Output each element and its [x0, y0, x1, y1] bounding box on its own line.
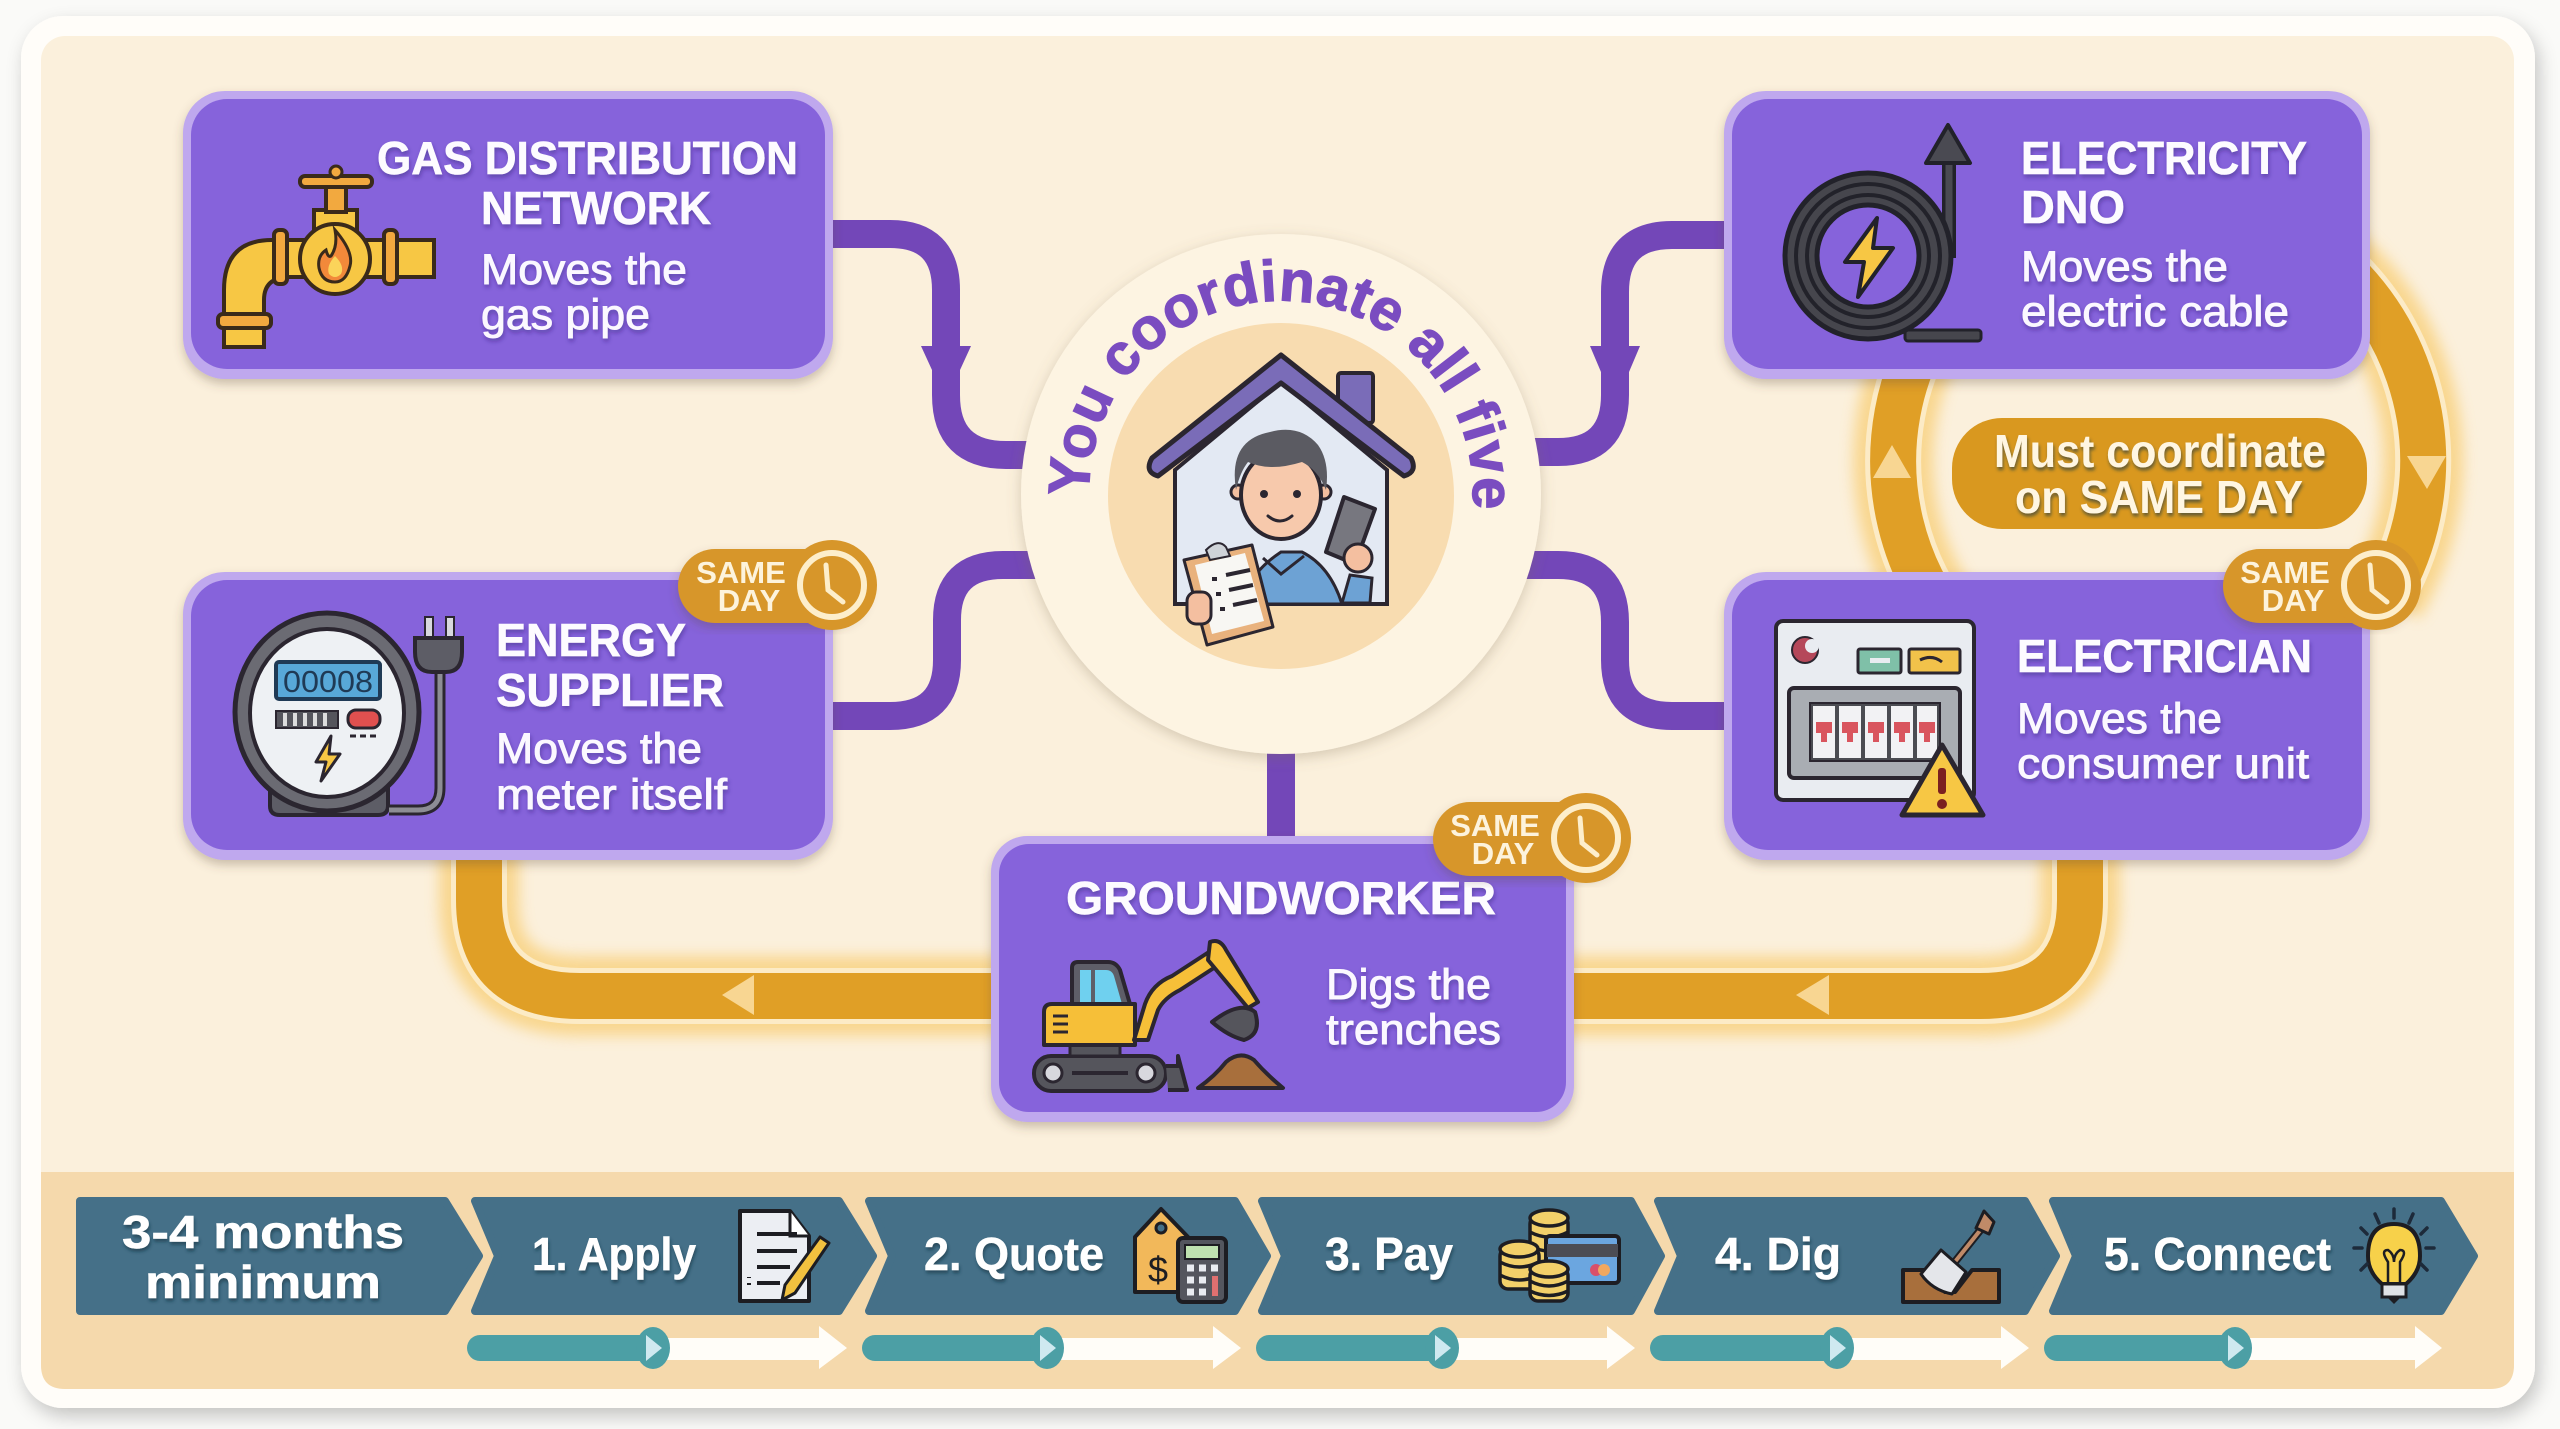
- text: electrician: ELECTRICIAN: [2017, 630, 2312, 682]
- icon: gas pipe valve: [218, 166, 434, 347]
- icon: excavator and dirt: [1034, 941, 1283, 1091]
- text: electricity dno: Moves the: [2021, 243, 2228, 291]
- chevron: quote: [869, 1201, 1267, 1311]
- chevron: 3-4 months minimum: minimum: [145, 1256, 381, 1308]
- icon: cable coil with arrow: [1785, 125, 1981, 341]
- inner disc: [1108, 323, 1454, 669]
- progress arrow 1: [467, 1326, 847, 1369]
- badge: same day energy supplier: [678, 540, 877, 630]
- icon: price tag and calculator: [1135, 1209, 1226, 1302]
- icon: person in house: [1149, 355, 1413, 645]
- gold path: groundworker to energy supplier: [479, 850, 1000, 996]
- panel: timeline strip: [41, 1172, 2514, 1389]
- gold loop: electricity to electrician: [1893, 196, 2423, 726]
- progress arrow 3: [1256, 1326, 1635, 1369]
- badge: same day groundworker: [1433, 793, 1631, 883]
- chevron: apply: [475, 1201, 873, 1311]
- text: groundworker: Digs the: [1326, 961, 1491, 1009]
- text: electricity dno: DNO: [2021, 181, 2125, 233]
- chevron: quote: 2. Quote: [924, 1228, 1104, 1280]
- connector: electricity to centre: [1520, 235, 1726, 452]
- text: energy supplier: Moves the: [496, 725, 702, 773]
- connector: energy supplier to centre: [830, 565, 1050, 716]
- callout: must coordinate on same day: [1952, 418, 2367, 529]
- connector: electrician to centre: [1520, 565, 1726, 716]
- panel: centre hub: [1015, 232, 1547, 764]
- badge: same day groundworker: DAY: [1472, 836, 1535, 871]
- curved title: you coordinate all five: You coordinate all five: [1048, 258, 1507, 508]
- callout: must coordinate on same day: on SAME DAY: [2015, 471, 2303, 523]
- text: electrician: Moves the: [2017, 695, 2222, 743]
- text: energy supplier: ENERGY: [496, 614, 686, 666]
- chevron: dig: 4. Dig: [1715, 1228, 1841, 1280]
- arrow: loop down: [2407, 456, 2446, 489]
- icon: shovel and soil: [1903, 1211, 1999, 1302]
- arrow: gold left: [722, 975, 754, 1015]
- chevron: apply: 1. Apply: [532, 1228, 696, 1280]
- icon: price tag and calculator: $: [1148, 1249, 1168, 1290]
- chevron: dig: [1658, 1201, 2056, 1311]
- arrow: loop up: [1873, 445, 1911, 478]
- text: groundworker: trenches: [1326, 1006, 1501, 1054]
- chevron: connect: [2053, 1201, 2474, 1311]
- panel: energy supplier: [183, 572, 833, 860]
- progress arrow 2: [862, 1326, 1241, 1369]
- text: electricity dno: ELECTRICITY: [2021, 132, 2307, 184]
- badge: same day electrician: [2223, 540, 2421, 630]
- badge: same day electrician: SAME: [2240, 555, 2330, 590]
- gold path: electrician to groundworker: [1565, 850, 2080, 996]
- text: energy supplier: meter itself: [496, 771, 728, 819]
- panel: groundworker: [991, 836, 1574, 1122]
- text: electricity dno: [2021, 132, 2307, 336]
- text: gas distribution network: Moves the: [481, 246, 687, 294]
- badge: same day electrician: DAY: [2262, 583, 2325, 618]
- panel: gas distribution network: [183, 91, 833, 379]
- text: gas distribution network: GAS DISTRIBUTION: [377, 132, 798, 184]
- callout: must coordinate on same day: Must coordinate: [1994, 425, 2326, 477]
- badge: same day energy supplier: SAME: [696, 555, 786, 590]
- progress arrow 5: [2044, 1326, 2442, 1369]
- icon: light bulb: [2354, 1209, 2434, 1304]
- text: gas distribution network: gas pipe: [481, 291, 650, 339]
- panel: electricity dno: [1724, 91, 2370, 379]
- connector: groundworker to centre: [1267, 750, 1295, 840]
- badge: same day groundworker: SAME: [1450, 808, 1540, 843]
- panel: electrician: [1724, 572, 2370, 860]
- arrow: gold left right side: [1796, 975, 1829, 1015]
- icon: electricity meter with plug: [235, 613, 462, 815]
- text: energy supplier: SUPPLIER: [496, 664, 724, 716]
- text: electricity dno: electric cable: [2021, 288, 2289, 336]
- text: gas distribution network: NETWORK: [481, 182, 711, 234]
- progress arrow 4: [1650, 1326, 2029, 1369]
- icon: coins and card: [1500, 1210, 1619, 1301]
- chevron: 3-4 months minimum: 3-4 months: [122, 1206, 404, 1258]
- icon: document and pencil: [740, 1211, 829, 1301]
- chevron: 3-4 months minimum: [80, 1201, 479, 1311]
- text: electrician: [2017, 630, 2312, 788]
- text: electrician: consumer unit: [2017, 740, 2309, 788]
- text: groundworker: GROUNDWORKER: [1066, 872, 1496, 924]
- text: gas distribution network: [377, 132, 798, 339]
- badge: same day energy supplier: DAY: [718, 583, 781, 618]
- chevron: pay: [1262, 1201, 1661, 1311]
- icon: electricity meter with plug: 00008: [283, 664, 373, 699]
- text: energy supplier: [496, 614, 728, 819]
- chevron: pay: 3. Pay: [1325, 1228, 1453, 1280]
- connector: gas to centre: [830, 234, 1050, 455]
- icon: consumer unit with warning: [1776, 621, 1983, 815]
- chevron: connect: 5. Connect: [2104, 1228, 2331, 1280]
- text: groundworker: [1066, 872, 1501, 1054]
